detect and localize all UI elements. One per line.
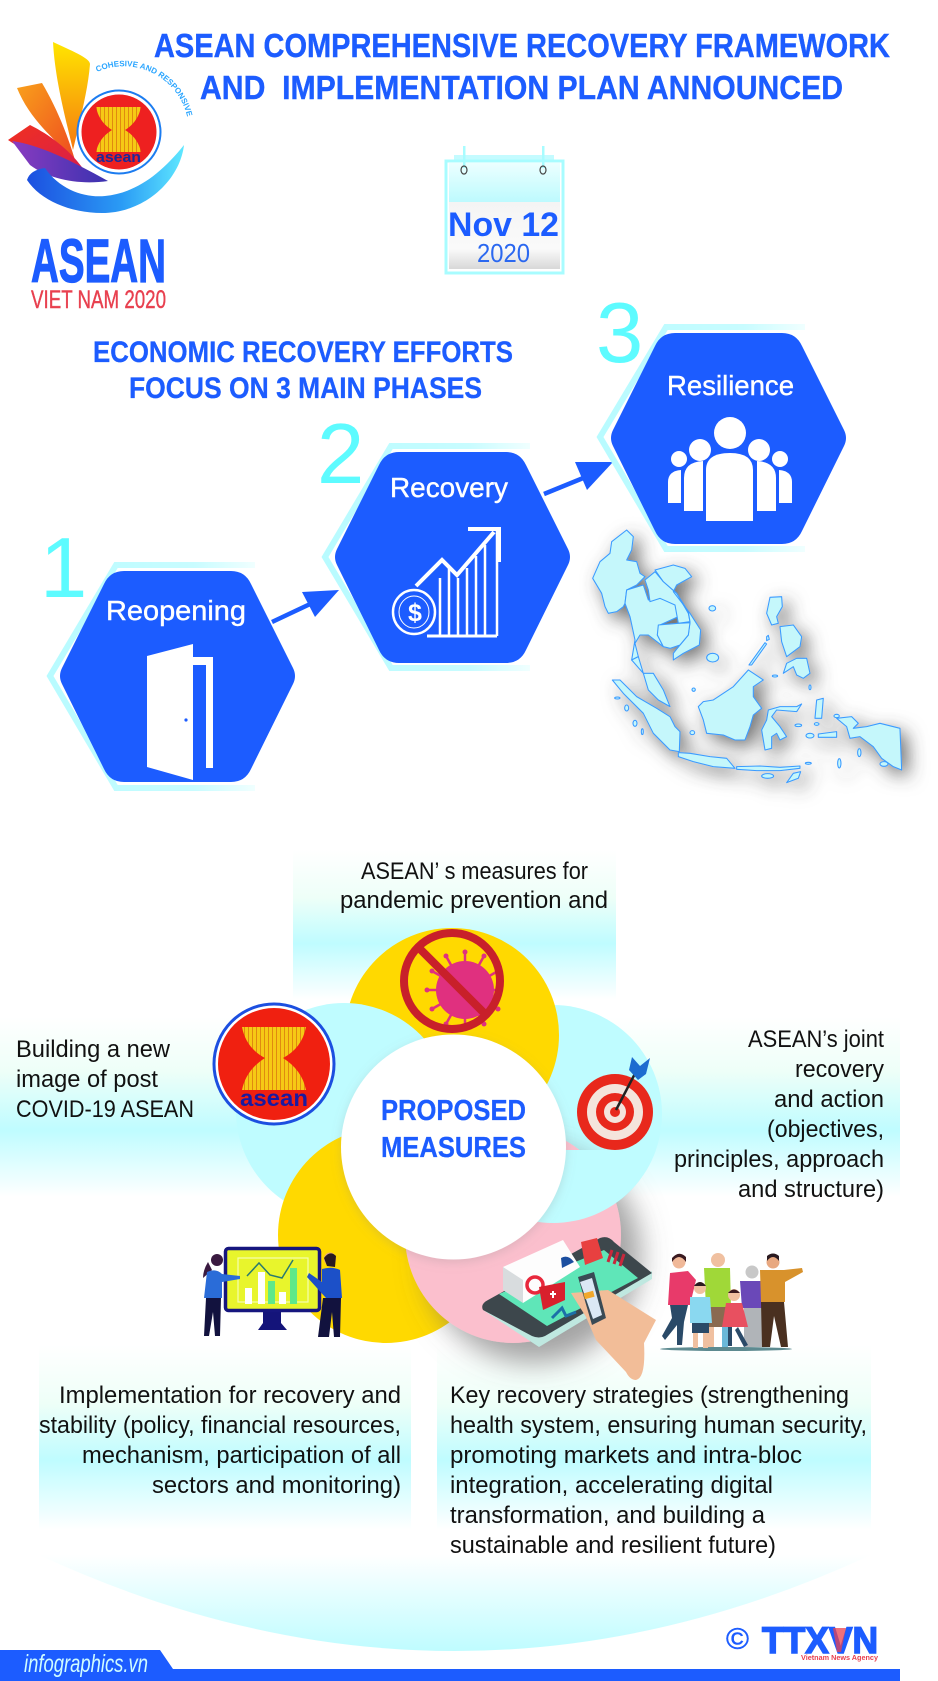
text: joint recovery: recovery xyxy=(795,1056,884,1083)
icon: door xyxy=(147,644,213,780)
credit: TTXVN logo: © xyxy=(726,1623,749,1656)
logo emblem xyxy=(78,90,160,174)
phases heading: ECONOMIC RECOVERY EFFORTS xyxy=(93,336,513,369)
logo petals xyxy=(8,42,108,182)
text: key recovery strategies: health system, ensuring human security, xyxy=(450,1412,867,1439)
icon: ASEAN emblem xyxy=(214,1004,334,1124)
map: Southeast Asia xyxy=(593,530,902,783)
number 3: 3 xyxy=(596,286,643,381)
icon: crossed-out virus xyxy=(404,933,503,1030)
text: key recovery strategies: sustainable and resilient future) xyxy=(450,1532,776,1559)
logo: ASEAN Viet Nam 2020: COHESIVE AND RESPONSIVE xyxy=(96,60,192,116)
footer bar: infographics.vn xyxy=(24,1650,148,1678)
logo wordmark: ASEAN xyxy=(31,227,166,295)
text: implementation: sectors and monitoring) xyxy=(152,1472,401,1499)
text: implementation xyxy=(39,1382,401,1499)
center label xyxy=(381,1095,526,1164)
text: implementation: Implementation for recovery and xyxy=(59,1382,401,1409)
arrow: reopening to recovery xyxy=(272,590,339,622)
text: new image: COVID-19 ASEAN xyxy=(16,1096,194,1123)
calendar: Nov 12 2020 xyxy=(446,146,563,273)
grandfather xyxy=(704,1253,731,1347)
text: joint recovery xyxy=(674,1026,884,1203)
text: new image: image of post xyxy=(16,1066,158,1093)
icon: ASEAN emblem: asean xyxy=(240,1085,308,1111)
title: AND IMPLEMENTATION PLAN ANNOUNCED xyxy=(200,69,843,106)
background panel: bottom gradient bands xyxy=(39,1345,871,1651)
text: new image xyxy=(16,1036,194,1123)
illustration: health care app on smartphone xyxy=(482,1237,656,1380)
text: joint recovery: ASEAN’s joint xyxy=(748,1026,884,1053)
woman xyxy=(203,1254,240,1336)
building xyxy=(503,1240,580,1303)
credit: TTXVN logo: TTXVN xyxy=(762,1620,878,1661)
credit: TTXVN logo: Vietnam News Agency xyxy=(801,1655,878,1662)
text: pandemic prevention: pandemic prevention and xyxy=(340,887,608,914)
phase 1: Reopening xyxy=(40,521,295,788)
illustration: family in masks xyxy=(660,1253,803,1351)
title xyxy=(154,27,890,106)
text: key recovery strategies: promoting markets and intra-bloc xyxy=(450,1442,802,1469)
phases heading: FOCUS ON 3 MAIN PHASES xyxy=(129,372,482,405)
calendar: Nov 12 2020: Nov 12 xyxy=(448,206,559,244)
text: new image: Building a new xyxy=(16,1036,171,1063)
text: key recovery strategies xyxy=(450,1382,867,1559)
calendar: Nov 12 2020: 2020 xyxy=(477,238,530,268)
phase 3: Resilience xyxy=(596,286,846,549)
logo: ASEAN Viet Nam 2020 xyxy=(8,42,192,314)
girl xyxy=(722,1289,748,1347)
father xyxy=(760,1254,803,1347)
text: implementation: stability (policy, financial resources, xyxy=(39,1412,401,1439)
diagram: proposed measures petals xyxy=(236,928,662,1343)
phase 2: Recovery xyxy=(317,407,570,668)
logo emblem: asean xyxy=(96,149,141,166)
text: pandemic prevention: ASEAN’ s measures for xyxy=(361,858,588,885)
center label: MEASURES xyxy=(381,1132,526,1164)
man xyxy=(307,1252,342,1337)
text: joint recovery: (objectives, xyxy=(767,1116,884,1143)
illustration: presenters at monitor xyxy=(203,1248,342,1337)
footer bar xyxy=(0,1650,900,1681)
monitor xyxy=(226,1248,320,1330)
first aid kit xyxy=(539,1282,565,1310)
text: joint recovery: and structure) xyxy=(738,1176,884,1203)
text: pandemic prevention xyxy=(340,858,608,914)
mother xyxy=(662,1254,696,1345)
label: Resilience xyxy=(667,370,794,401)
logo arc slogan xyxy=(97,66,189,150)
phases heading xyxy=(93,336,513,405)
number 2: 2 xyxy=(317,407,364,502)
number 1: 1 xyxy=(40,521,87,616)
icon: group of people xyxy=(668,417,792,521)
text: joint recovery: and action xyxy=(774,1086,884,1113)
text: implementation: mechanism, participation of all xyxy=(82,1442,401,1469)
text: key recovery strategies: integration, accelerating digital xyxy=(450,1472,773,1499)
hand holding phone xyxy=(571,1272,656,1380)
arrow: recovery to resilience xyxy=(544,462,613,494)
label: Reopening xyxy=(106,595,246,626)
center label: PROPOSED xyxy=(381,1095,526,1127)
label: Recovery xyxy=(390,472,508,503)
background panel: top and side gradient bands xyxy=(0,850,900,1197)
icon: growth chart and coin: $ xyxy=(408,599,422,627)
boy xyxy=(690,1282,712,1348)
logo swoosh xyxy=(27,145,184,213)
text: key recovery strategies: transformation, and building a xyxy=(450,1502,766,1529)
grandmother xyxy=(740,1266,764,1347)
text: key recovery strategies: Key recovery strategies (strengthening xyxy=(450,1382,849,1409)
icon: growth chart and coin xyxy=(393,528,499,636)
logo: ASEAN Viet Nam 2020: VIET NAM 2020 xyxy=(31,286,166,314)
icon: target with dart xyxy=(577,1057,653,1150)
text: joint recovery: principles, approach xyxy=(674,1146,884,1173)
